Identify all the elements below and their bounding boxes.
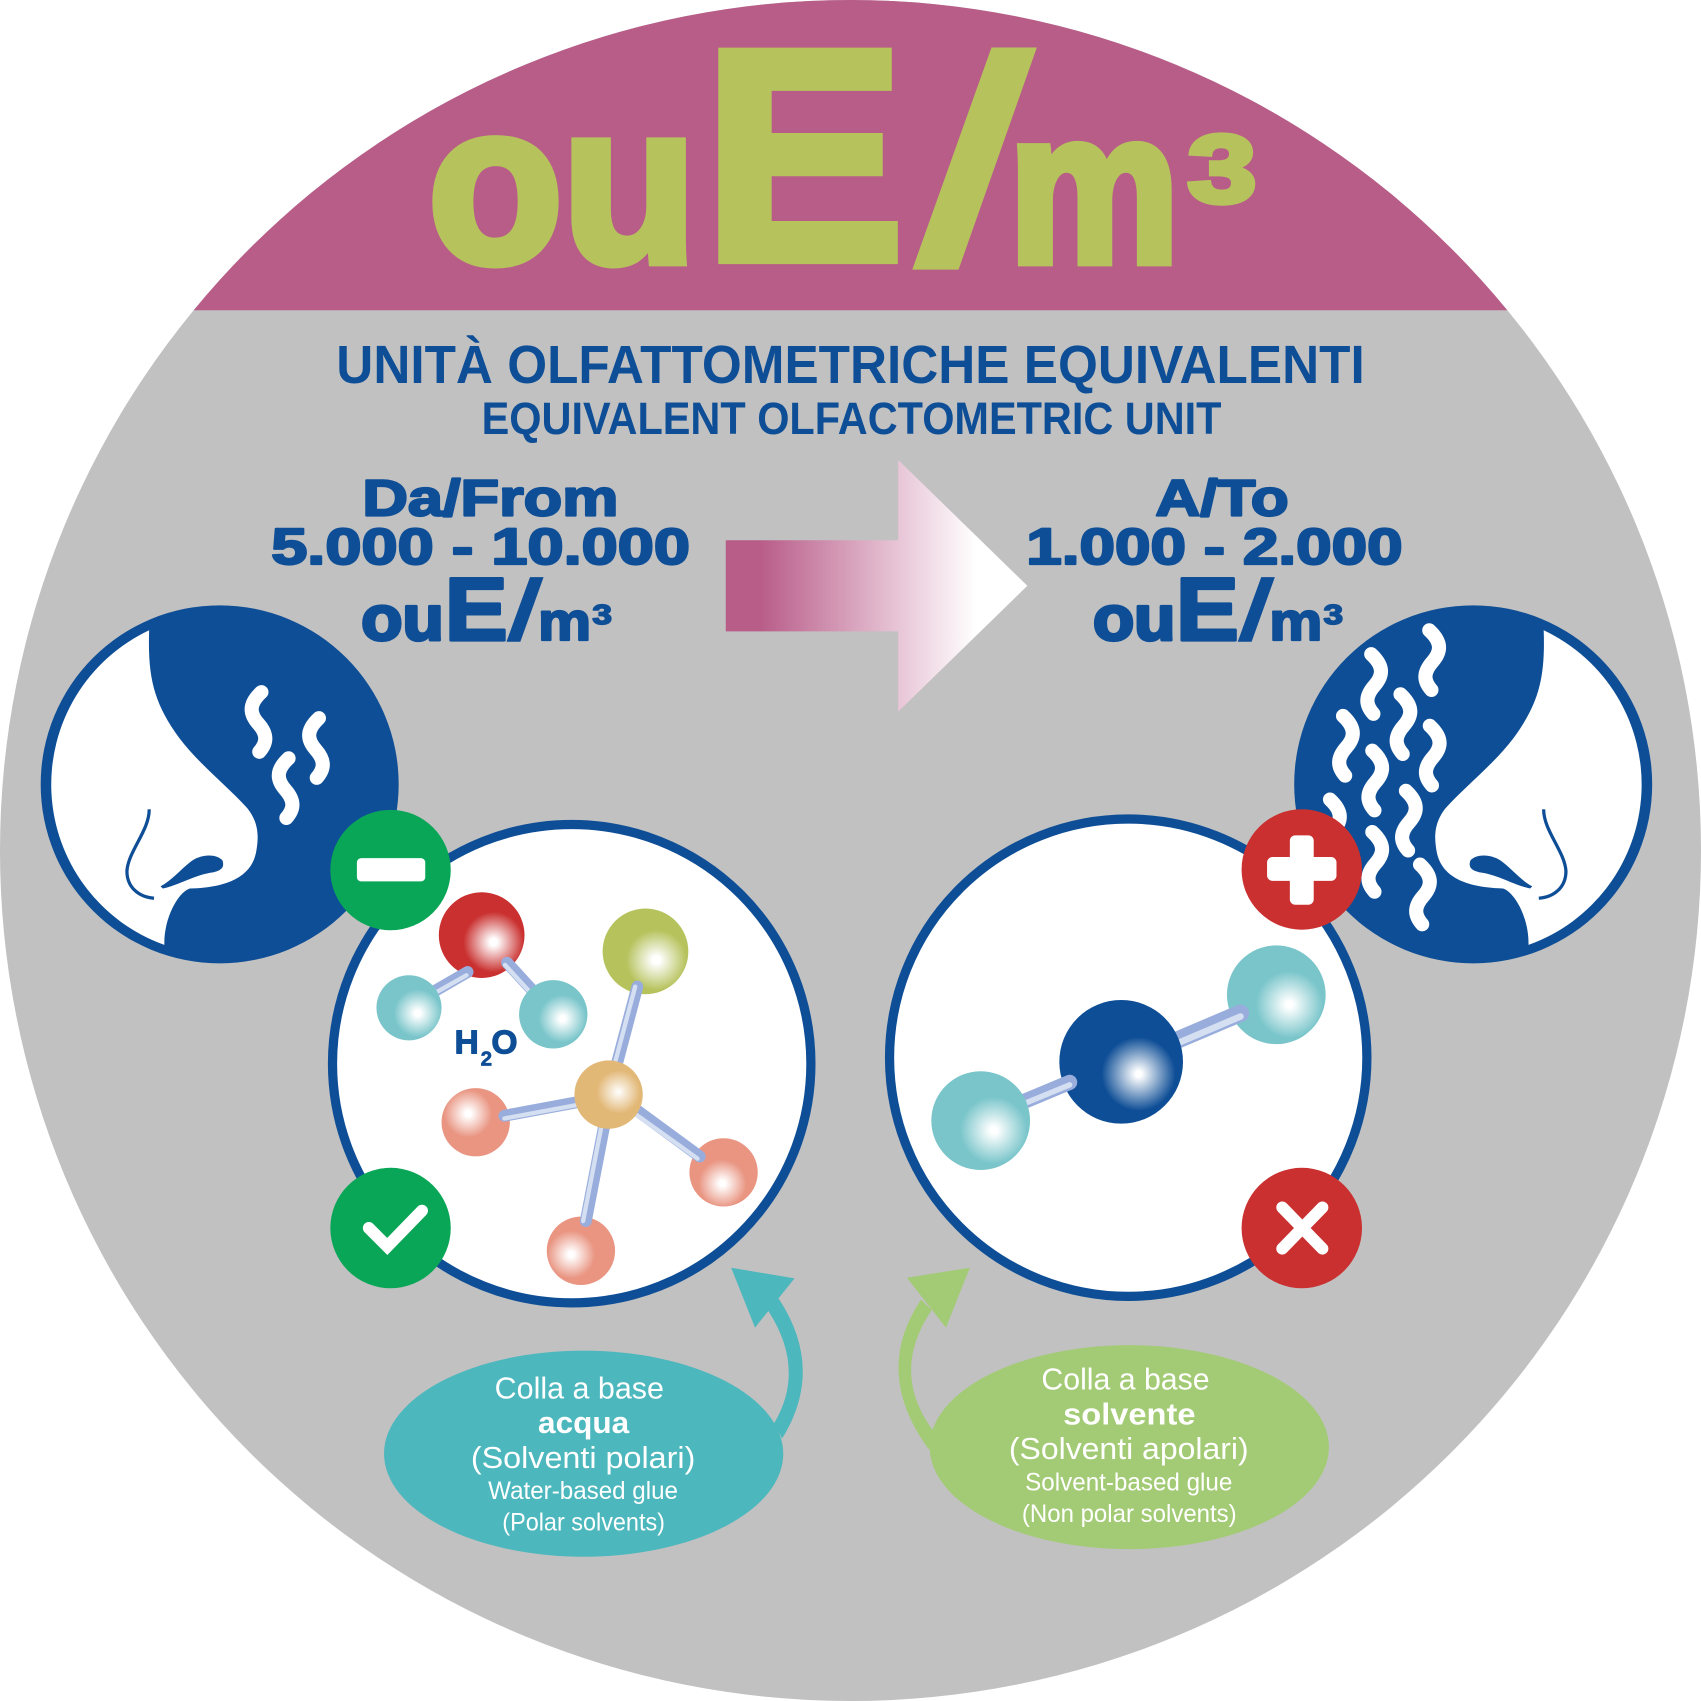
from values: ou (361, 584, 444, 654)
central atom (574, 1060, 643, 1129)
callout: water-based glue (384, 1351, 783, 1557)
to values: m (1269, 592, 1322, 652)
title: ouE/m3 (429, 0, 1256, 327)
to values: / (1235, 562, 1278, 659)
callout: solvent-based glue: (Solventi apolari) (1009, 1433, 1249, 1466)
arrow: green curved (898, 1268, 970, 1450)
bond: lower (1020, 1082, 1070, 1105)
icon: nose with few odour waves (41, 605, 399, 963)
callout: solvent-based glue: Solvent-based glue (1025, 1469, 1232, 1497)
callout: water-based glue: (Polar solvents) (502, 1509, 665, 1537)
upper hydrogen-like atom (1227, 945, 1326, 1044)
arrow: teal curved (731, 1268, 803, 1438)
badge: check (330, 1168, 451, 1288)
H2O label: 2 (481, 1047, 492, 1070)
title: ouE/m3: / (902, 0, 1048, 327)
arrow: gradient from to (726, 460, 1027, 712)
callout: water-based glue: acqua (538, 1407, 630, 1440)
bond: upper (1172, 1013, 1240, 1046)
to values: 3 (1323, 598, 1343, 630)
badge: minus (330, 810, 451, 930)
to values: E (1176, 559, 1239, 659)
panel: apolar molecule circle (890, 819, 1367, 1296)
panel: polar molecule circle (332, 824, 811, 1303)
icon: nose with many odour waves (1294, 605, 1652, 963)
from values: 5.000 - 10.000 (271, 518, 690, 575)
H2O label (455, 1024, 518, 1070)
outer atoms: polar molecule (442, 909, 758, 1285)
callout: solvent-based glue: Colla a base (1041, 1364, 1210, 1397)
from values: E (445, 559, 508, 659)
callout: solvent-based glue: (Non polar solvents) (1022, 1500, 1237, 1528)
from values (271, 469, 690, 659)
to values: 1.000 - 2.000 (1026, 518, 1403, 575)
from values: 3 (592, 598, 612, 630)
title: ouE/m3: ou (429, 57, 696, 309)
callout: solvent-based glue (930, 1345, 1329, 1549)
H2O label: H (455, 1024, 479, 1061)
from values: / (504, 562, 546, 659)
from values: Da/From (362, 469, 618, 526)
oxygen atom (439, 892, 525, 978)
molecule bonds: polar (434, 963, 700, 1221)
to values: A/To (1155, 469, 1289, 526)
heading: English: EQUIVALENT OLFACTOMETRIC UNIT (482, 393, 1222, 444)
from values: m (538, 592, 591, 652)
H2O label: O (491, 1024, 518, 1061)
to values: ou (1093, 584, 1175, 654)
title: ouE/m3: 3 (1188, 117, 1256, 223)
callout: water-based glue: (Solventi polari) (471, 1442, 695, 1475)
badge: plus (1242, 809, 1362, 930)
heading: Italian: UNITÀ OLFATTOMETRICHE EQUIVALENTI (336, 335, 1365, 395)
badge: cross (1242, 1168, 1362, 1288)
central navy atom (1059, 1000, 1183, 1124)
title: ouE/m3: m (1009, 67, 1179, 307)
callout: solvent-based glue: solvente (1063, 1398, 1195, 1431)
callout: water-based glue: Water-based glue (488, 1477, 678, 1505)
hydrogen atoms (376, 975, 587, 1048)
callout: water-based glue: Colla a base (495, 1372, 664, 1405)
to values (1026, 469, 1403, 659)
lower atom (931, 1071, 1030, 1170)
title band (194, 0, 1508, 310)
